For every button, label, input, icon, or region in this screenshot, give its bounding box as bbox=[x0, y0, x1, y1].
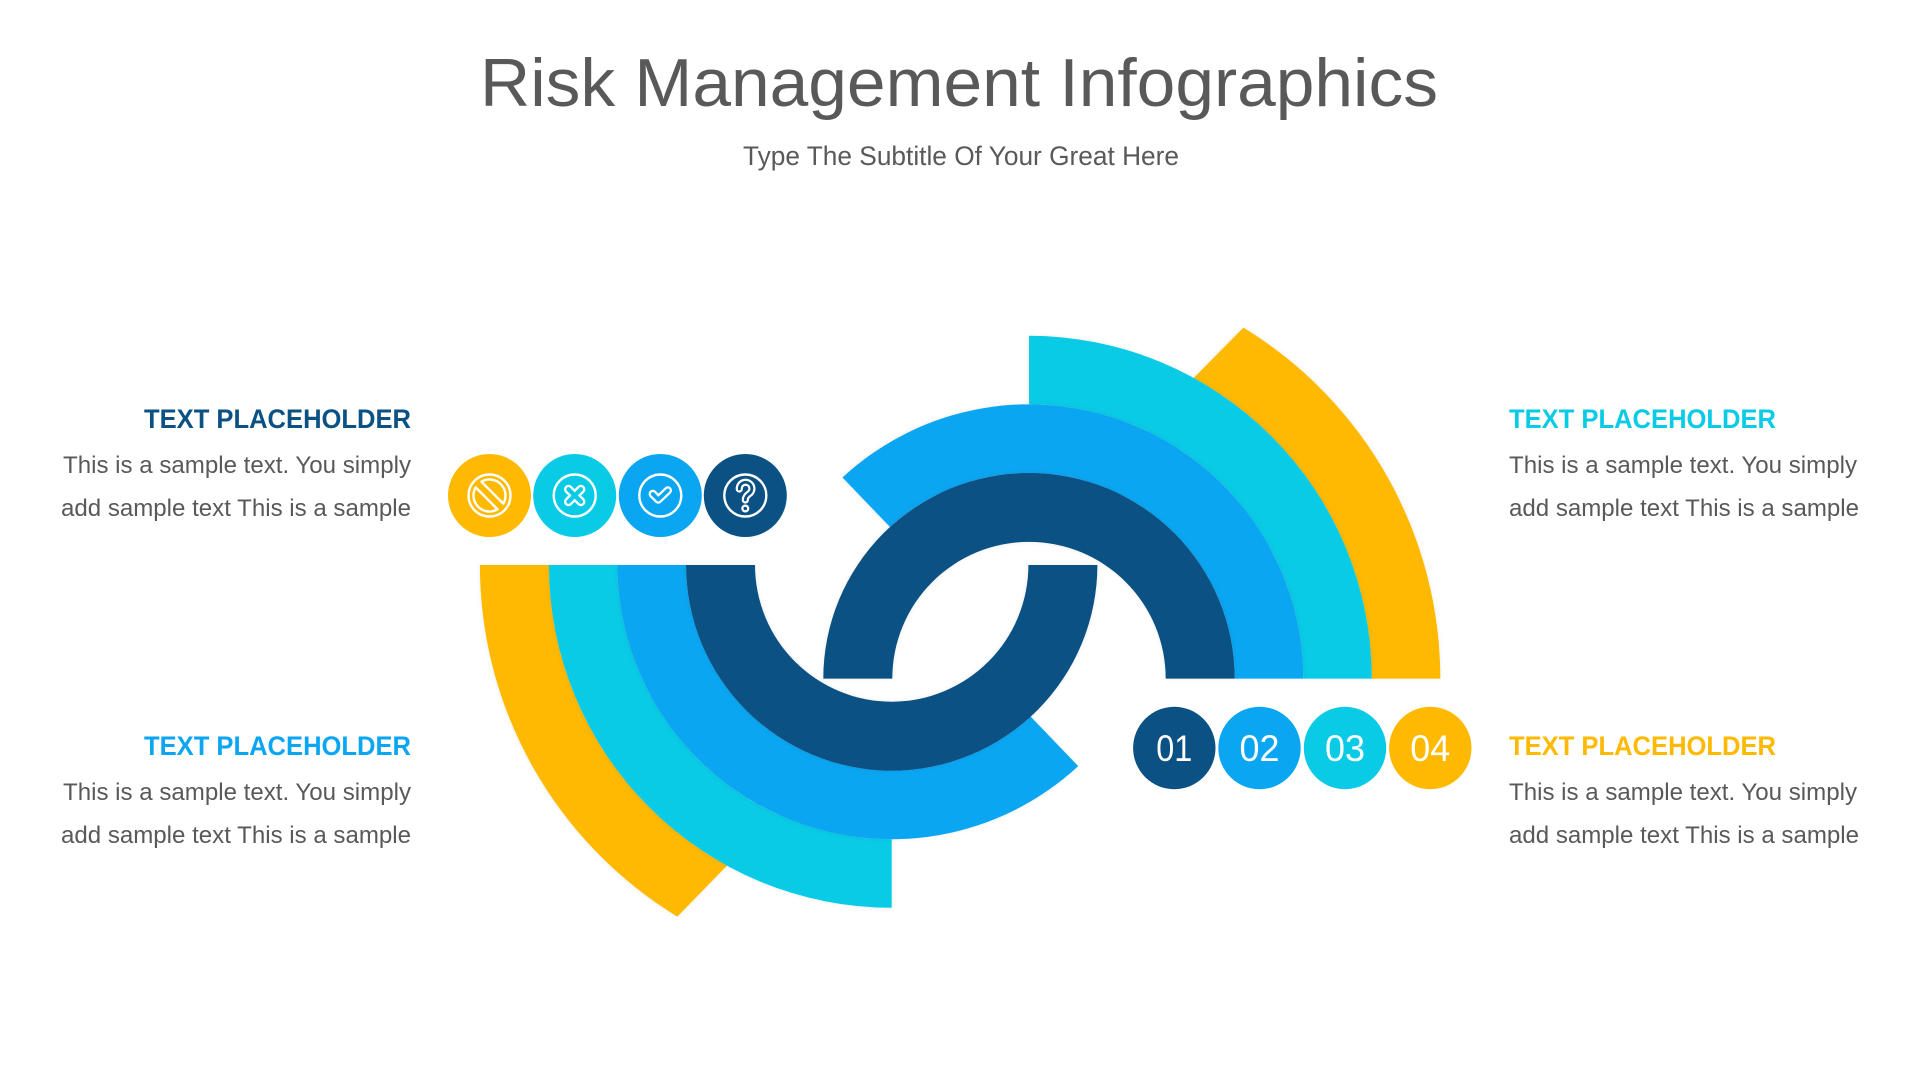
body: top right line 2: add sample text This is a sample bbox=[1509, 495, 1859, 522]
heading: top right: TEXT PLACEHOLDER bbox=[1509, 404, 1776, 434]
title: Risk Management Infographics bbox=[480, 45, 1438, 121]
arc: teal lower bbox=[549, 565, 892, 908]
body: bottom left line 1: This is a sample text. You simply bbox=[63, 779, 411, 806]
icon: question mark on navy circle bbox=[704, 454, 787, 537]
number badge 04 bbox=[1389, 707, 1472, 789]
number badge 01 bbox=[1133, 707, 1216, 789]
heading: top left: TEXT PLACEHOLDER bbox=[144, 404, 411, 434]
body: top left line 1: This is a sample text. You simply bbox=[63, 452, 411, 479]
body: bottom right line 2: add sample text This is a sample bbox=[1509, 822, 1859, 849]
body: top right line 1: This is a sample text. You simply bbox=[1509, 452, 1857, 479]
diagram: lower arcs bbox=[480, 565, 1097, 917]
body: bottom left line 2: add sample text This is a sample bbox=[61, 822, 411, 849]
number badge 02: 02 bbox=[1240, 728, 1280, 769]
text block: top left bbox=[61, 404, 411, 522]
text block: top right bbox=[1509, 404, 1859, 522]
icon: prohibited sign on yellow circle bbox=[448, 454, 531, 537]
arc: blue lower bbox=[617, 565, 1078, 839]
icon: cross on teal circle bbox=[533, 454, 616, 537]
text block: bottom left bbox=[61, 731, 411, 849]
text block: bottom right bbox=[1509, 731, 1859, 849]
number badge 01: 01 bbox=[1156, 728, 1192, 769]
arc: yellow lower bbox=[480, 565, 727, 917]
arc: navy lower bbox=[686, 565, 1097, 771]
arc: teal upper bbox=[1029, 336, 1372, 679]
arc: navy upper bbox=[823, 473, 1235, 679]
icon: check mark on blue circle bbox=[619, 454, 702, 537]
body: bottom right line 1: This is a sample text. You simply bbox=[1509, 779, 1857, 806]
heading: bottom right: TEXT PLACEHOLDER bbox=[1509, 731, 1776, 761]
arc: blue upper bbox=[842, 404, 1303, 679]
diagram: upper arcs bbox=[823, 328, 1440, 679]
number badge 02 bbox=[1218, 707, 1301, 789]
heading: bottom left: TEXT PLACEHOLDER bbox=[144, 731, 411, 761]
arc: yellow upper bbox=[1194, 328, 1440, 679]
number badge 04: 04 bbox=[1410, 728, 1450, 769]
body: top left line 2: add sample text This is a sample bbox=[61, 495, 411, 522]
number badge 03 bbox=[1304, 707, 1386, 789]
subtitle: Type The Subtitle Of Your Great Here bbox=[743, 141, 1179, 171]
number badge 03: 03 bbox=[1325, 728, 1365, 769]
